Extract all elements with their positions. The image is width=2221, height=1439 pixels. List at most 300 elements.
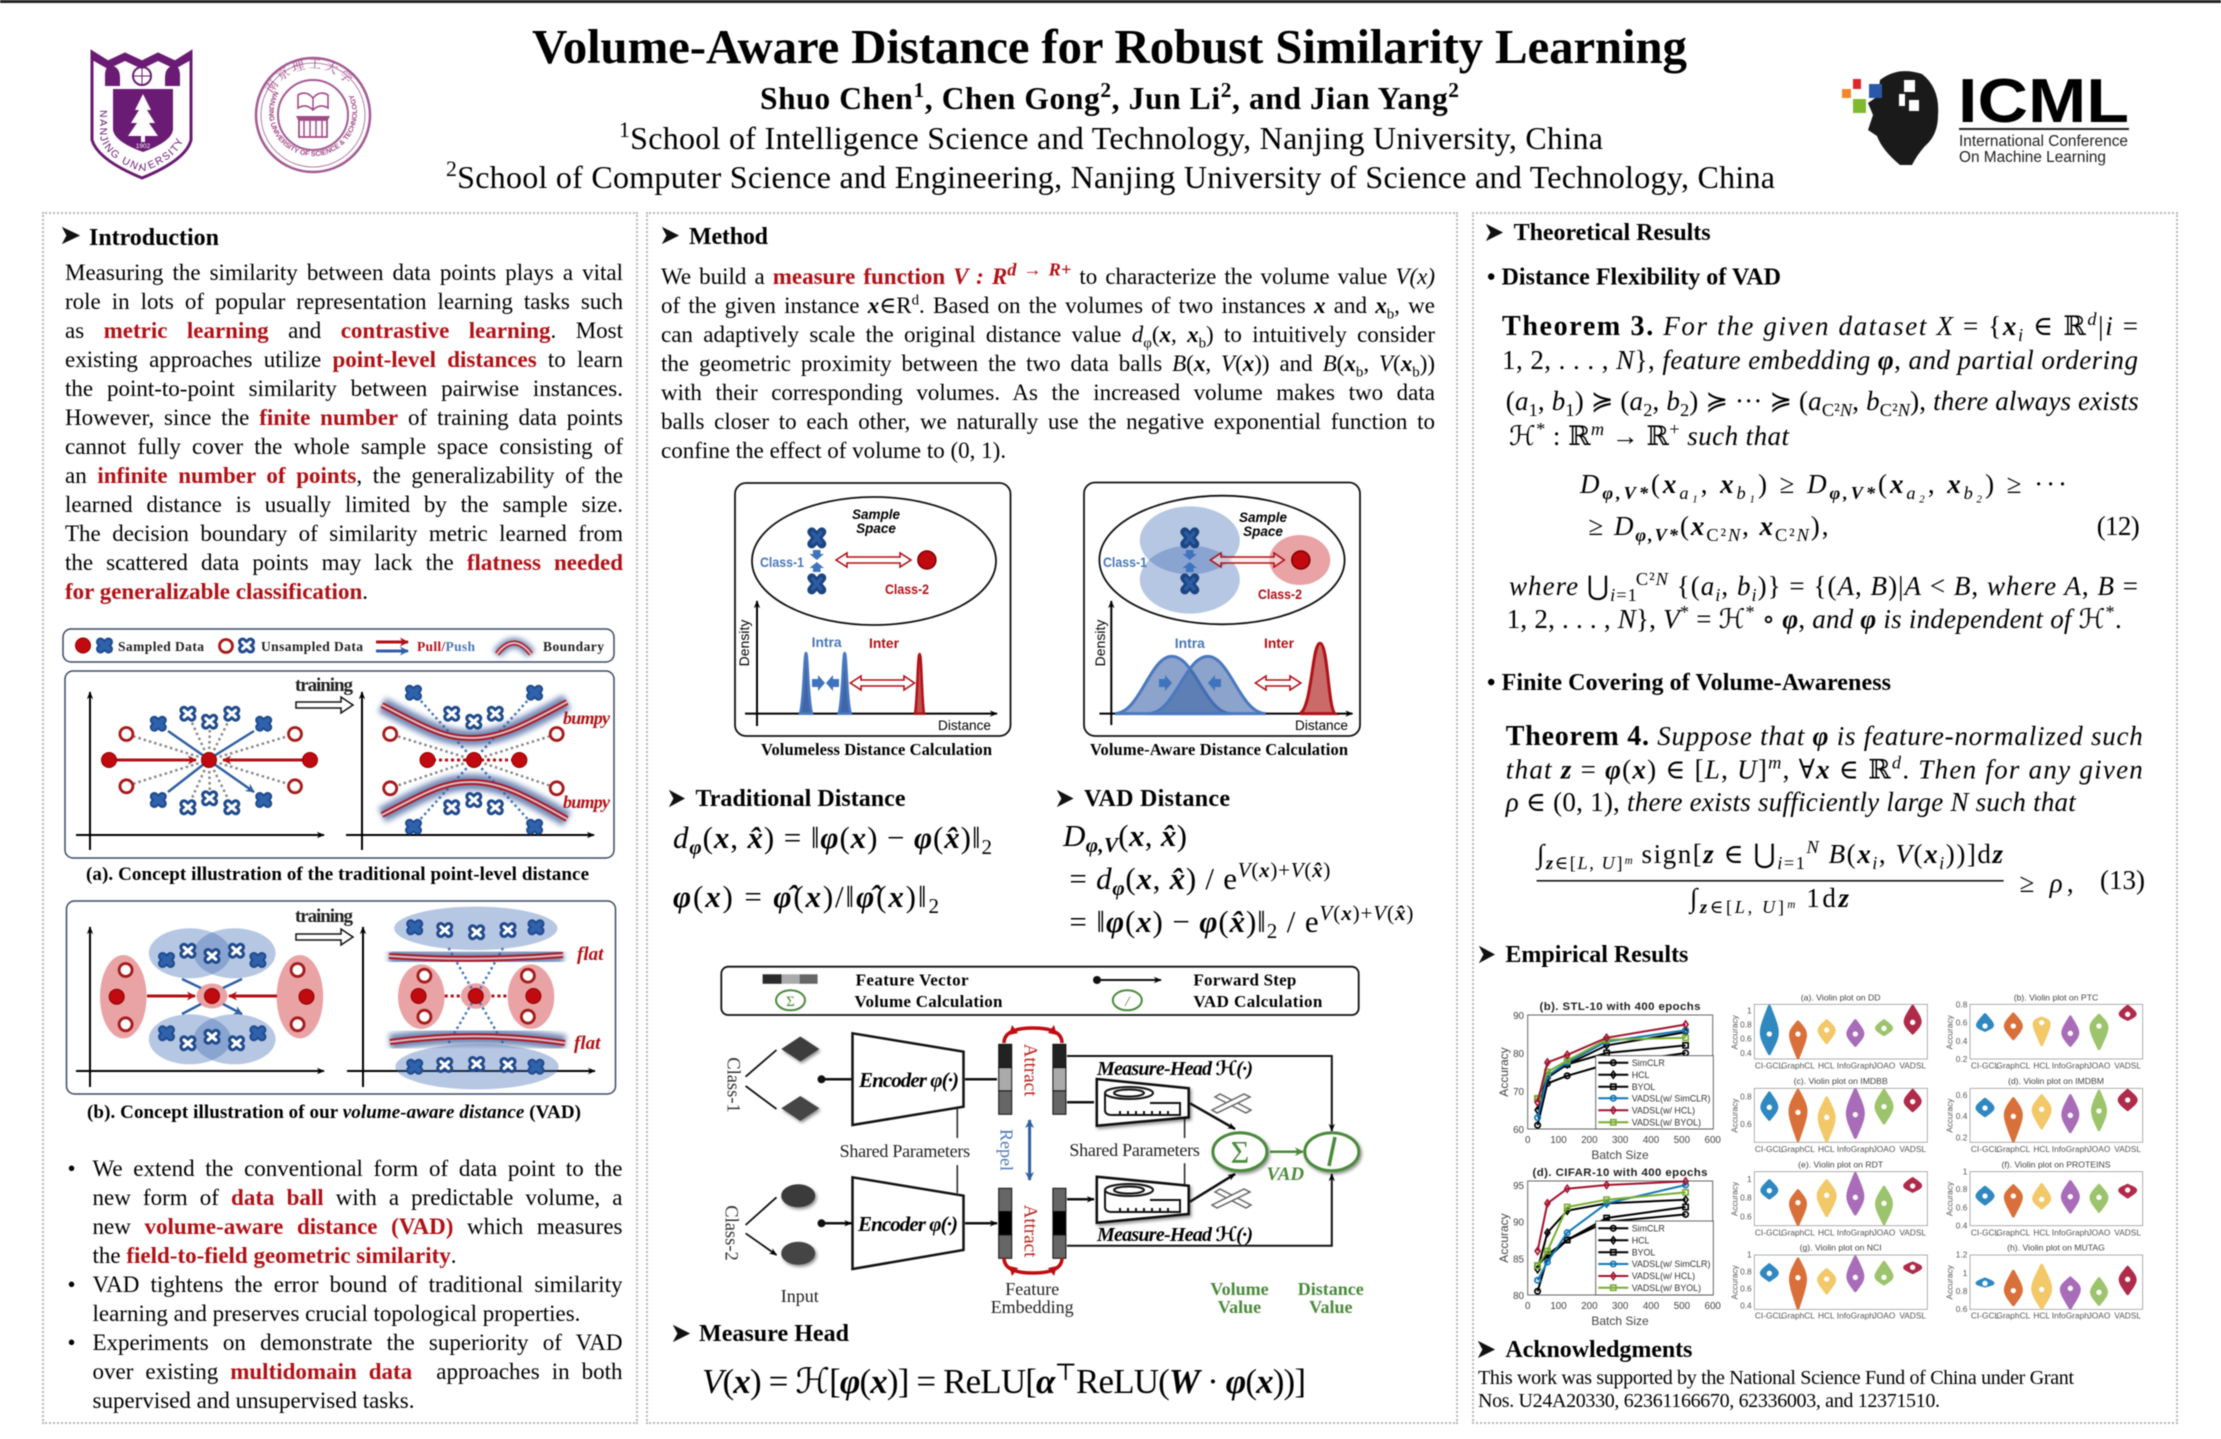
affiliation 2: 2School of Computer Science and Engineering, Nanjing University of Science and Technology, China: [446, 157, 1775, 195]
line chart: CIFAR-10: 100: [1550, 1301, 1567, 1312]
diagram: network architecture: Encoder φ(·): [857, 1212, 958, 1236]
equation: VAD definition: = ‖φ(x) − φ(x̂)‖2 / eV(x)+V(x̂): [1069, 901, 1413, 943]
equation 12: Dφ,V*(xa₁, xb₁) ≥ Dφ,V*(xa₂, xb₂) ≥ ···: [1579, 469, 2067, 502]
violin plot: NCI: (g). Violin plot on NCI: [1800, 1243, 1882, 1253]
figure: volume-aware distance: Distance: [1295, 717, 1348, 733]
violin plot: IMDBM: [1945, 1076, 2143, 1154]
violin plot: PROTEINS: [1945, 1159, 2143, 1237]
violin plot: PROTEINS: VADSL: [2114, 1227, 2141, 1237]
violin plot: RDT: Accuracy: [1729, 1181, 1739, 1216]
logo: ICML: ICML: [1958, 67, 2129, 136]
violin plot: IMDBM: 0.2: [1956, 1132, 1968, 1142]
logo: Nanjing University of Science and Technology: 南京理工大学: [264, 58, 353, 94]
figure: volumeless distance: Class-2: [885, 581, 929, 597]
violin plot: IMDBM: CI-GCL: [1971, 1144, 1999, 1154]
legend: data symbols: Boundary: [543, 639, 604, 654]
violin plot: DD: [1729, 993, 1927, 1071]
violin plot: PTC: 0.2: [1956, 1054, 1968, 1064]
theorem 3: Theorem 3. For the given dataset X = {xi ∈ ℝd|i =: [1502, 309, 2138, 344]
legend: data symbols: Unsampled Data: [261, 639, 363, 654]
equation 12: (12): [2097, 511, 2140, 541]
line chart: CIFAR-10: VADSL(w/ BYOL): [1632, 1283, 1701, 1293]
figure: volume-aware distance: Class-2: [1258, 586, 1302, 602]
line chart: STL-10: (b). STL-10 with 400 epochs: [1540, 1001, 1700, 1013]
theorem 3: ℋ* : ℝm → ℝ+ such that: [1509, 419, 1790, 451]
contributions list: new volume-aware distance (VAD) which measures: [92, 1214, 622, 1239]
diagram: network architecture: Encoder φ(·): [858, 1068, 959, 1092]
line chart: STL-10: 200: [1581, 1135, 1598, 1146]
diagram: network architecture: Volume: [1210, 1279, 1269, 1299]
panel b: volume-aware distance: flat: [577, 944, 604, 965]
method paragraph: the geometric proximity between the two data balls B(x, V(x)) and B(xb, V(xb)): [661, 351, 1435, 381]
theorem 4: [1505, 721, 2145, 916]
violin plot: DD: InfoGraph: [1837, 1061, 1874, 1071]
line chart: CIFAR-10: HCL: [1632, 1236, 1650, 1246]
method heading: Method: [689, 224, 769, 250]
violin plot: RDT: VADSL: [1899, 1227, 1926, 1237]
diagram: network architecture: VAD: [1266, 1164, 1304, 1185]
introduction paragraph: the point-to-point similarity between pairwise instances.: [65, 376, 623, 401]
line chart: CIFAR-10: 95: [1513, 1181, 1525, 1192]
violin plot: IMDBM: 0.6: [1956, 1090, 1968, 1100]
violin plot: IMDBB: VADSL: [1899, 1144, 1926, 1154]
line chart: STL-10: 500: [1674, 1135, 1691, 1146]
figure: volumeless distance: Sample: [852, 507, 900, 522]
legend: network diagram: Σ: [786, 994, 795, 1010]
line chart: CIFAR-10: (d). CIFAR-10 with 400 epochs: [1532, 1167, 1708, 1179]
input samples: [781, 1036, 819, 1265]
introduction paragraph: However, since the finite number of training data points: [65, 405, 623, 430]
violin plot: PROTEINS: CI-GCL: [1971, 1227, 1999, 1237]
line chart: CIFAR-10: [1497, 1167, 1721, 1328]
figure: volume-aware distance: Density: [1092, 620, 1108, 666]
violin plot: IMDBB: HCL: [1818, 1144, 1835, 1154]
contributions list: new form of data ball with a predictable volume, a: [92, 1185, 622, 1210]
violin plot: NCI: InfoGraph: [1837, 1311, 1874, 1321]
legend: network diagram: VAD Calculation: [1193, 992, 1323, 1011]
diagram: network architecture: Measure-Head ℋ(·): [1096, 1058, 1253, 1080]
violin plot: IMDBB: 0.8: [1740, 1091, 1752, 1101]
theorem 4: ρ ∈ (0, 1), there exists sufficiently large N such that: [1505, 787, 2077, 817]
violin plot: PTC: JOAO: [2088, 1061, 2111, 1071]
violin plot: DD: (a). Violin plot on DD: [1801, 993, 1881, 1003]
violin plot: IMDBB: 0.6: [1740, 1119, 1752, 1129]
method paragraph: with their corresponding volumes. As the increased volume makes two data: [661, 380, 1435, 405]
violin plot: PROTEINS: (f). Violin plot on PROTEINS: [2001, 1159, 2111, 1169]
axis labels: Input: [781, 1286, 819, 1306]
axis labels: Embedding: [991, 1297, 1074, 1317]
violin plot: DD: CI-GCL: [1755, 1061, 1783, 1071]
violin plot: DD: 0.6: [1740, 1034, 1752, 1044]
violin plot: RDT: CI-GCL: [1755, 1227, 1783, 1237]
violin plot: MUTAG: JOAO: [2088, 1311, 2111, 1321]
acknowledgments text: This work was supported by the National Science Fund of China under Grant: [1478, 1367, 2074, 1389]
equation 13: ∫z∈[L, U]ᵐ sign[z ∈ ⋃i=1N B(xi, V(xi))]dz: [1535, 837, 2003, 872]
violin plot: MUTAG: 0.8: [1956, 1286, 1968, 1296]
header: [90, 19, 2130, 196]
forward paths: [1067, 1056, 1332, 1131]
line chart: STL-10: 100: [1550, 1135, 1567, 1146]
contributions list: [68, 1156, 623, 1414]
line chart: STL-10: Batch Size: [1591, 1148, 1649, 1162]
violin plot: RDT: GraphCL: [1781, 1227, 1815, 1237]
figure: volumeless distance: Inter: [869, 635, 900, 651]
violin plot: IMDBB: [1729, 1076, 1927, 1154]
violin plot: PROTEINS: GraphCL: [1996, 1227, 2031, 1237]
equation: normalization: φ(x) = φ̂(x)/‖φ̂(x)‖2: [673, 879, 939, 918]
line chart: STL-10: Accuracy: [1497, 1047, 1511, 1097]
class labels: Class-2: [721, 1205, 741, 1261]
line chart: CIFAR-10: Accuracy: [1497, 1213, 1511, 1263]
figure: volumeless distance: [735, 483, 1010, 736]
violin plot: RDT: 1: [1747, 1174, 1752, 1184]
introduction paragraph: as metric learning and contrastive learning. Most: [65, 318, 623, 343]
violin plot: PTC: [1945, 993, 2143, 1071]
violin plot: PTC: InfoGraph: [2052, 1061, 2089, 1071]
attract and repel: Repel: [996, 1129, 1016, 1171]
line chart: CIFAR-10: Batch Size: [1591, 1314, 1649, 1328]
legend: data symbols: Sampled Data: [118, 639, 204, 654]
violin plot: PTC: VADSL: [2114, 1061, 2141, 1071]
theorem 3: [1502, 309, 2140, 634]
figure: volumeless distance: Intra: [812, 634, 842, 650]
line chart: STL-10: 80: [1513, 1049, 1525, 1060]
equation 13: ∫z∈[L, U]ᵐ 1dz: [1688, 883, 1849, 916]
violin plot: PROTEINS: 1: [1963, 1166, 1968, 1176]
line chart: CIFAR-10: 400: [1643, 1301, 1660, 1312]
equation: VAD definition: [1062, 818, 1413, 943]
violin plot: MUTAG: VADSL: [2114, 1311, 2141, 1321]
violin plot: PROTEINS: Accuracy: [1945, 1181, 1955, 1216]
violin plot: NCI: CI-GCL: [1755, 1311, 1783, 1321]
class labels: Class-1: [723, 1057, 743, 1113]
theorem 4: that z = φ(x) ∈ [L, U]m, ∀x ∈ ℝd. Then for any given: [1506, 752, 2143, 784]
attract and repel: Attract: [1020, 1205, 1041, 1258]
violin plot: IMDBB: GraphCL: [1781, 1144, 1815, 1154]
heading: empirical results: Empirical Results: [1505, 942, 1688, 968]
violin plot: IMDBM: HCL: [2033, 1144, 2050, 1154]
violin plot: IMDBM: VADSL: [2114, 1144, 2141, 1154]
panel: theoretical and empirical results: [1472, 212, 2178, 1424]
equation 13: ≥ ρ,: [2020, 868, 2074, 898]
line chart: CIFAR-10: 600: [1705, 1301, 1721, 1312]
figure: volume-aware distance: Intra: [1175, 635, 1205, 651]
heading: measure head: Measure Head: [699, 1321, 850, 1347]
figure: volume-aware distance: Class-1: [1103, 554, 1147, 570]
violin plot: PTC: Accuracy: [1945, 1014, 1955, 1049]
panel: introduction: •: [68, 1272, 76, 1297]
figure: volume-aware distance: Inter: [1264, 635, 1295, 651]
line chart: STL-10: VADSL(w/ SimCLR): [1632, 1094, 1710, 1104]
violin plot: PROTEINS: JOAO: [2088, 1227, 2111, 1237]
introduction paragraph: learned distance is usually limited by the sample size.: [65, 492, 623, 517]
violin plot: NCI: GraphCL: [1781, 1311, 1815, 1321]
heading: traditional distance: Traditional Distance: [696, 786, 906, 812]
diagram: network architecture: Distance: [1298, 1279, 1364, 1299]
introduction paragraph: The decision boundary of similarity metric learned from: [65, 521, 623, 546]
violin plot: PTC: HCL: [2033, 1061, 2050, 1071]
diagram: network architecture: Value: [1218, 1297, 1261, 1317]
violin plot: MUTAG: 1.2: [1956, 1250, 1968, 1260]
contributions list: the field-to-field geometric similarity.: [92, 1243, 457, 1268]
violin plot: IMDBB: InfoGraph: [1837, 1144, 1874, 1154]
introduction paragraph: [64, 260, 624, 605]
authors: Shuo Chen1, Chen Gong2, Jun Li2, and Jian Yang2: [760, 78, 1459, 116]
panel b: volume-aware distance: [66, 901, 616, 1094]
line chart: STL-10: 90: [1513, 1011, 1525, 1022]
violin plot: NCI: 1: [1747, 1250, 1752, 1260]
violin plot: RDT: HCL: [1818, 1227, 1835, 1237]
violin plot: DD: JOAO: [1873, 1061, 1896, 1071]
violin plot: PROTEINS: 0.4: [1956, 1220, 1968, 1230]
theorem 3: (a1, b1) ≽ (a2, b2) ≽ ··· ≽ (aC²N, bC²N), there always exists: [1506, 386, 2139, 420]
training arrow: [295, 906, 354, 945]
subheading: finite covering: • Finite Covering of Volume-Awareness: [1487, 670, 1891, 696]
line chart: STL-10: 300: [1612, 1135, 1629, 1146]
equation: VAD definition: = dφ(x, x̂) / eV(x)+V(x̂): [1069, 858, 1330, 900]
violin plot: NCI: VADSL: [1899, 1311, 1926, 1321]
diagram: network architecture: Value: [1309, 1297, 1352, 1317]
violin plot: IMDBB: JOAO: [1873, 1144, 1896, 1154]
violin plot: NCI: JOAO: [1873, 1311, 1896, 1321]
attract and repel: Attract: [1020, 1044, 1041, 1097]
panel a: traditional point-level distance: bumpy: [563, 708, 611, 728]
equation 13: (13): [2100, 865, 2145, 895]
violin plot: IMDBM: JOAO: [2088, 1144, 2111, 1154]
violin plot: IMDBB: (c). Violin plot on IMDBB: [1794, 1076, 1888, 1086]
icon: division node: [1305, 1133, 1359, 1171]
line chart: STL-10: 600: [1705, 1135, 1721, 1146]
violin plot: RDT: InfoGraph: [1837, 1227, 1874, 1237]
violin plot: MUTAG: (h). Violin plot on MUTAG: [2007, 1243, 2105, 1253]
violin plot: PTC: (b). Violin plot on PTC: [2014, 993, 2098, 1003]
violin plot: DD: 0.4: [1740, 1048, 1752, 1058]
panel a: traditional point-level distance: bumpy: [563, 792, 611, 812]
legend: network diagram: [721, 967, 1359, 1015]
line chart: STL-10: 400: [1643, 1135, 1660, 1146]
line chart: STL-10: VADSL(w/ BYOL): [1632, 1118, 1701, 1128]
caption b: (b). Concept illustration of our volume-aware distance (VAD): [87, 1102, 581, 1123]
panel a: traditional point-level distance: [65, 671, 614, 858]
introduction paragraph: the scattered data points may lack the flatness needed: [65, 550, 623, 575]
violin plot: IMDBM: InfoGraph: [2052, 1144, 2089, 1154]
logo: ICML: [1842, 67, 2129, 166]
method paragraph: of the given instance x∈Rd. Based on the volumes of two instances x and xb, we: [661, 292, 1435, 323]
violin plot: RDT: 0.8: [1740, 1193, 1752, 1203]
theorem 3: where ⋃i=1C²N {(ai, bi)} = {(A, B)|A < B, where A, B =: [1509, 569, 2138, 604]
violin plot: DD: VADSL: [1899, 1061, 1926, 1071]
logo: Nanjing University: 1902: [136, 143, 151, 150]
violin plot: PTC: GraphCL: [1996, 1061, 2031, 1071]
method paragraph: confine the effect of volume to (0, 1).: [661, 438, 1006, 463]
introduction heading: Introduction: [89, 225, 219, 251]
equation: traditional distance: dφ(x, x̂) = ‖φ(x) − φ(x̂)‖2: [673, 820, 992, 859]
line chart: STL-10: 70: [1513, 1087, 1525, 1098]
violin plot: DD: 1: [1747, 1006, 1752, 1016]
logo: Nanjing University of Science and Technology: NANJING UNIVERSITY OF SCIENCE & TECHNOLOGY: [268, 90, 358, 157]
line chart: CIFAR-10: 200: [1581, 1301, 1598, 1312]
panel: introduction: [42, 212, 638, 1424]
contributions list: over existing multidomain data approaches in both: [92, 1359, 622, 1384]
violin plot: NCI: Accuracy: [1729, 1264, 1739, 1299]
violin plot: MUTAG: HCL: [2033, 1311, 2050, 1321]
violin plot: NCI: 0.8: [1740, 1266, 1752, 1276]
line chart: CIFAR-10: SimCLR: [1632, 1224, 1665, 1234]
violin plot: NCI: [1729, 1243, 1927, 1321]
introduction paragraph: Measuring the similarity between data points plays a vital: [65, 260, 623, 285]
figures and equations: [668, 480, 1414, 1402]
theorem 3: 1, 2, . . . , N}, V* = ℋ* ∘ φ, and φ is independent of ℋ*.: [1507, 602, 2122, 634]
figure: concept illustrations: [62, 628, 617, 1123]
violin plot: IMDBB: CI-GCL: [1755, 1144, 1783, 1154]
violin plot: MUTAG: [1945, 1243, 2143, 1321]
violin plot: IMDBM: 0.4: [1956, 1111, 1968, 1121]
diagram: network architecture: [721, 1025, 1364, 1317]
equation: measure head: V(x) = ℋ[φ(x)] = ReLU[α⊤ReLU(W · φ(x))]: [702, 1360, 1306, 1401]
training arrow: training: [295, 906, 354, 927]
equation 12: [1579, 469, 2140, 544]
figure: volumeless distance: Density: [736, 620, 752, 666]
violin plot: MUTAG: InfoGraph: [2052, 1311, 2089, 1321]
legend: network diagram: /: [1124, 994, 1131, 1010]
legend: network diagram: Forward Step: [1193, 970, 1296, 990]
introduction paragraph: an infinite number of points, the generalizability of the: [65, 463, 623, 488]
introduction paragraph: for generalizable classification.: [65, 579, 368, 604]
method paragraph: We build a measure function V : Rd → R+ to characterize the volume value V(x): [661, 259, 1435, 289]
violin plot: PTC: 0.8: [1956, 1000, 1968, 1010]
training arrow: [295, 675, 354, 713]
panel: introduction: •: [68, 1330, 76, 1355]
method paragraph: [660, 259, 1436, 464]
icon: sum node: [1213, 1133, 1267, 1171]
figure caption: Volumeless Distance Calculation: [761, 740, 992, 759]
icon: measuring tape: [1105, 1087, 1180, 1212]
axis labels: Feature: [1005, 1279, 1059, 1299]
legend: data symbols: [63, 629, 614, 662]
violin plot: MUTAG: CI-GCL: [1971, 1311, 1999, 1321]
introduction paragraph: existing approaches utilize point-level distances to learn: [65, 347, 623, 372]
line chart: STL-10: [1497, 1001, 1721, 1162]
line chart: CIFAR-10: 90: [1513, 1218, 1525, 1229]
legend: network diagram: Feature Vector: [856, 970, 969, 990]
contributions list: Experiments on demonstrate the superiority of VAD: [92, 1330, 622, 1355]
violin plot: PTC: 0.4: [1956, 1036, 1968, 1046]
theorem 3: 1, 2, . . . , N}, feature embedding φ, and partial ordering: [1502, 345, 2138, 375]
line chart: CIFAR-10: 500: [1674, 1301, 1691, 1312]
violin plot: MUTAG: 1: [1963, 1268, 1968, 1278]
violin plot: MUTAG: GraphCL: [1996, 1311, 2031, 1321]
encoders: [852, 1033, 964, 1269]
method paragraph: balls closer to each other, we naturally use the negative exponential function to: [661, 409, 1435, 434]
heading: acknowledgments: Acknowledgments: [1505, 1337, 1692, 1363]
acknowledgments text: [1478, 1367, 2074, 1412]
top rule: [0, 0, 2221, 3]
title: Volume-Aware Distance for Robust Similarity Learning: [532, 19, 1688, 74]
violin plot: NCI: 0.6: [1740, 1283, 1752, 1293]
violin plot: DD: 0.8: [1740, 1020, 1752, 1030]
logo: ICML: On Machine Learning: [1959, 149, 2106, 166]
figure caption: Volume-Aware Distance Calculation: [1090, 740, 1348, 759]
violin plot: IMDBM: (d). Violin plot on IMDBM: [2008, 1076, 2104, 1086]
panel b: volume-aware distance: flat: [574, 1033, 601, 1054]
line chart: CIFAR-10: VADSL(w/ SimCLR): [1632, 1259, 1710, 1269]
violin plot: PTC: CI-GCL: [1971, 1061, 1999, 1071]
figure: volumeless distance: Class-1: [760, 554, 804, 570]
line chart: STL-10: BYOL: [1632, 1082, 1655, 1092]
contributions list: supervised and unsupervised tasks.: [92, 1388, 414, 1413]
violin plot: RDT: (e). Violin plot on RDT: [1798, 1159, 1884, 1169]
icon: ruler and pencil: [1212, 1094, 1251, 1208]
line chart: CIFAR-10: 300: [1612, 1301, 1629, 1312]
logo: Nanjing University of Science and Technology: [254, 56, 372, 174]
violin plot: RDT: 0.6: [1740, 1211, 1752, 1221]
violin plot: IMDBB: Accuracy: [1729, 1098, 1739, 1133]
diagram: network architecture: Shared Parameters: [840, 1141, 970, 1161]
line chart: STL-10: 0: [1525, 1135, 1531, 1146]
diagram: network architecture: Shared Parameters: [1069, 1140, 1200, 1160]
violin plot: PROTEINS: InfoGraph: [2052, 1227, 2089, 1237]
legend: data symbols: Pull/Push: [417, 639, 475, 654]
violin plot: PROTEINS: HCL: [2033, 1227, 2050, 1237]
heading: VAD distance: VAD Distance: [1084, 786, 1230, 812]
introduction paragraph: cannot fully cover the whole sample space consisting of: [65, 434, 623, 459]
axis labels: [781, 1279, 1074, 1317]
line chart: STL-10: VADSL(w/ HCL): [1632, 1106, 1695, 1116]
subheading: distance flexibility: • Distance Flexibility of VAD: [1487, 264, 1781, 290]
violin plot: DD: HCL: [1818, 1061, 1835, 1071]
line chart: CIFAR-10: 85: [1513, 1254, 1525, 1265]
violin plot: NCI: 0.4: [1740, 1300, 1752, 1310]
line chart: CIFAR-10: BYOL: [1632, 1248, 1655, 1258]
violin plot: MUTAG: Accuracy: [1945, 1264, 1955, 1299]
equation: VAD definition: Dφ,V(x, x̂): [1062, 818, 1187, 857]
heading: theoretical results: Theoretical Results: [1514, 220, 1711, 246]
introduction paragraph: role in lots of popular representation learning tasks such: [65, 289, 623, 314]
panel: introduction: •: [68, 1156, 76, 1181]
measure heads: [1097, 1079, 1189, 1223]
line chart: CIFAR-10: VADSL(w/ HCL): [1632, 1271, 1695, 1281]
method paragraph: can adaptively scale the original distance value dφ(x, xb) to intuitively consider: [661, 322, 1435, 352]
violin plot: NCI: HCL: [1818, 1311, 1835, 1321]
figure: volumeless distance: Space: [856, 521, 896, 536]
violin plot: IMDBM: GraphCL: [1996, 1144, 2031, 1154]
diagram: network architecture: Measure-Head ℋ(·): [1096, 1224, 1253, 1246]
violin plot: PROTEINS: 0.8: [1956, 1184, 1968, 1194]
figure: volumeless distance: Distance: [938, 717, 991, 733]
figure: volume-aware distance: Sample: [1239, 510, 1287, 525]
logo: Nanjing University: [90, 48, 194, 180]
affiliation 1: 1School of Intelligence Science and Technology, Nanjing University, China: [619, 118, 1603, 156]
class labels: [721, 1057, 743, 1261]
caption a: (a). Concept illustration of the traditional point-level distance: [86, 864, 589, 885]
panel: method: [646, 212, 1458, 1424]
violin plots: [1729, 993, 2143, 1321]
feature embeddings: [999, 1044, 1066, 1258]
equation 13: [1535, 837, 2145, 916]
legend: network diagram: Volume Calculation: [854, 992, 1003, 1011]
line chart: STL-10: SimCLR: [1632, 1058, 1665, 1068]
line chart: CIFAR-10: 80: [1513, 1291, 1525, 1302]
line chart: STL-10: HCL: [1632, 1070, 1650, 1080]
theorem 4: Theorem 4. Suppose that φ is feature-normalized such: [1506, 721, 2143, 752]
violin plot: PTC: 0.6: [1956, 1018, 1968, 1028]
violin plot: PROTEINS: 0.6: [1956, 1202, 1968, 1212]
violin plot: IMDBM: Accuracy: [1945, 1098, 1955, 1133]
icon: sum node: Σ: [1231, 1134, 1249, 1170]
training arrow: training: [295, 675, 354, 696]
contributions list: VAD tightens the error bound of traditional similarity: [92, 1272, 622, 1297]
figure: volume-aware distance: Space: [1243, 524, 1283, 539]
